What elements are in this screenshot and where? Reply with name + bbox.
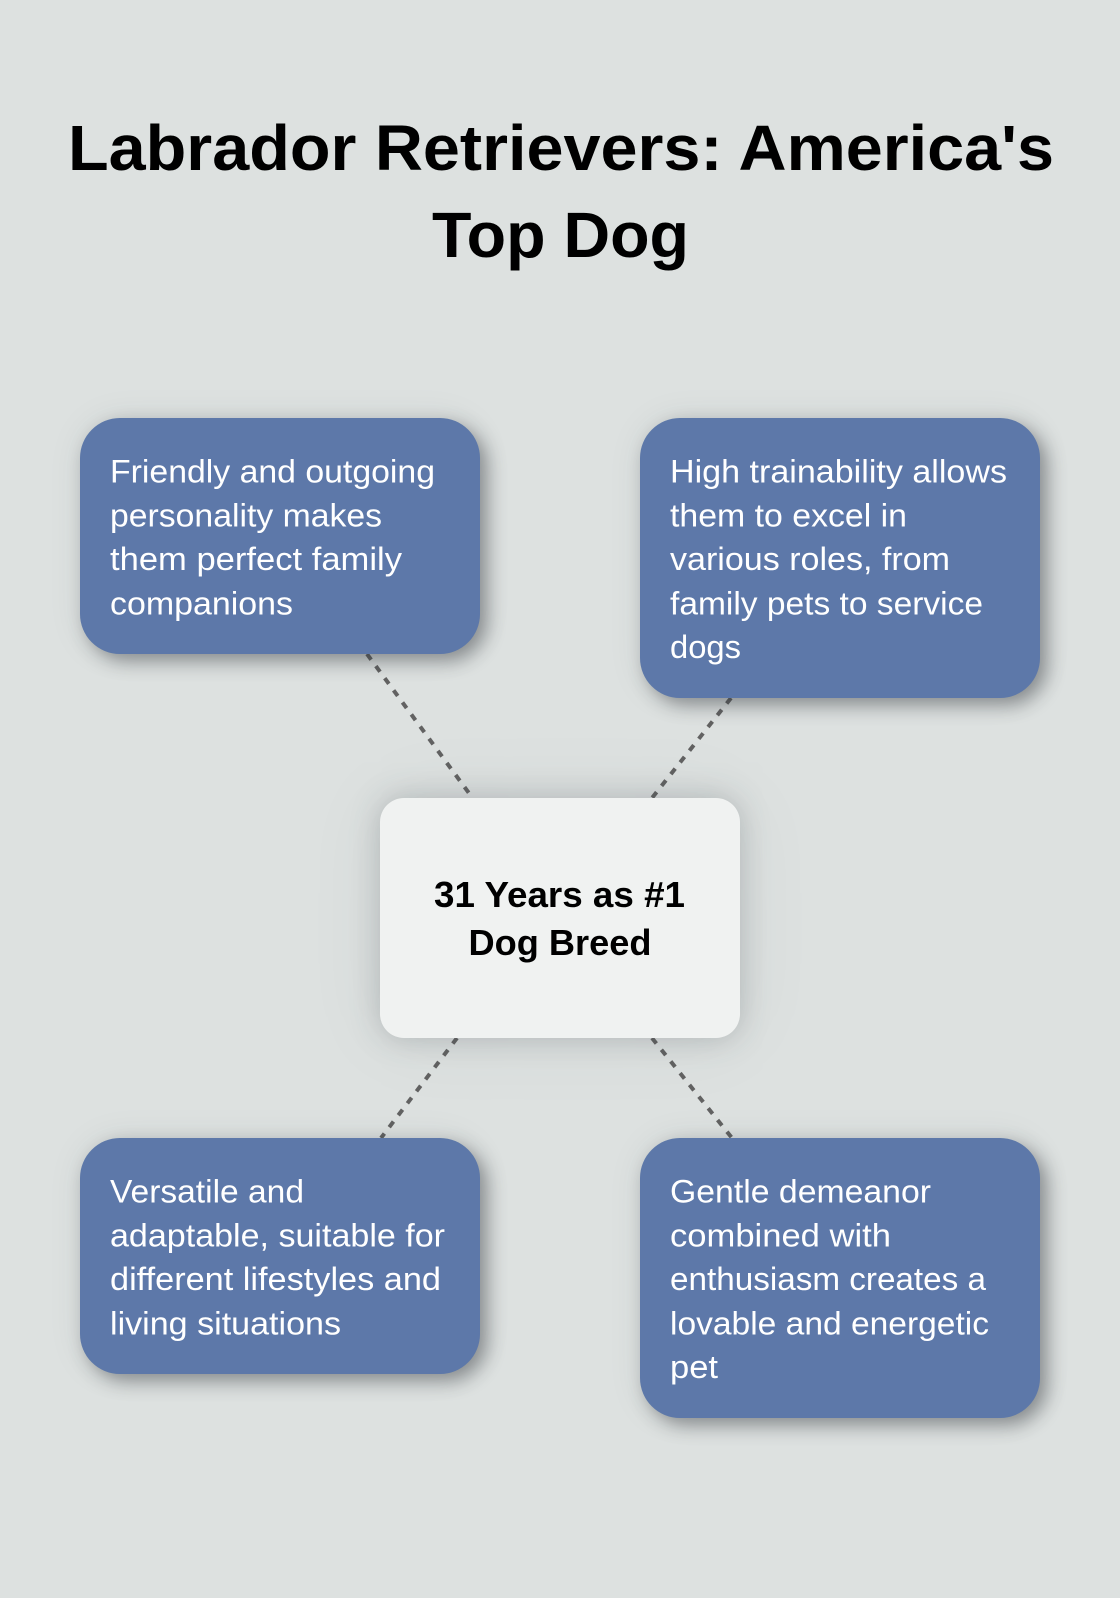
panel: friendly personality: companions bbox=[110, 586, 293, 622]
panel: friendly personality: them perfect family bbox=[110, 541, 402, 577]
panel: versatile and adaptable bbox=[80, 1138, 480, 1374]
panel: central statistic: 31 Years as #1 bbox=[434, 874, 685, 915]
panel: central statistic: Dog Breed bbox=[468, 922, 652, 963]
title: Labrador Retrievers: America's bbox=[68, 112, 1054, 184]
panel: high trainability bbox=[640, 418, 1040, 698]
panel: gentle demeanor: enthusiasm creates a bbox=[670, 1261, 986, 1297]
title bbox=[68, 112, 1054, 271]
panel: gentle demeanor: Gentle demeanor bbox=[670, 1174, 931, 1210]
panel: high trainability: various roles, from bbox=[670, 541, 950, 577]
panel: gentle demeanor: lovable and energetic bbox=[670, 1306, 989, 1342]
panel: friendly personality: personality makes bbox=[110, 498, 382, 534]
panel: gentle demeanor: pet bbox=[670, 1349, 718, 1385]
panel: friendly personality: Friendly and outgoing bbox=[110, 454, 435, 490]
panel: central statistic bbox=[380, 798, 740, 1038]
panel: versatile and adaptable: different lifestyles and bbox=[110, 1261, 441, 1297]
panel: gentle demeanor: combined with bbox=[670, 1218, 891, 1254]
panel: gentle demeanor bbox=[640, 1138, 1040, 1418]
panel: versatile and adaptable: adaptable, suitable for bbox=[110, 1218, 445, 1254]
panel: versatile and adaptable: Versatile and bbox=[110, 1174, 304, 1210]
panel: high trainability: dogs bbox=[670, 629, 741, 665]
title: Top Dog bbox=[432, 199, 689, 271]
panel: high trainability: them to excel in bbox=[670, 498, 907, 534]
panel: high trainability: High trainability allows bbox=[670, 454, 1007, 490]
panel: friendly personality bbox=[80, 418, 480, 654]
panel: high trainability: family pets to service bbox=[670, 586, 983, 622]
panel: versatile and adaptable: living situations bbox=[110, 1306, 341, 1342]
